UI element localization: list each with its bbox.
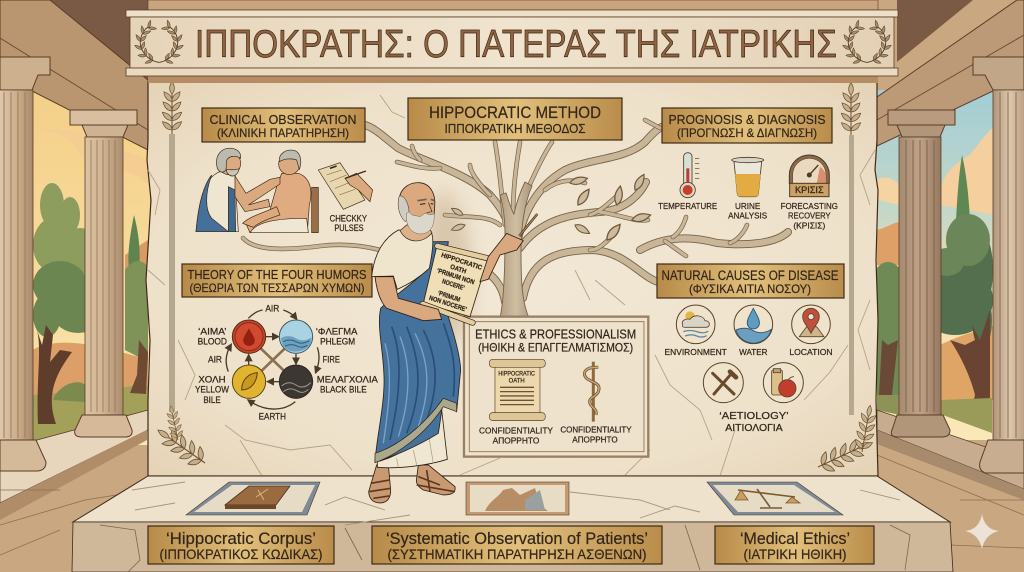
right pilaster strip [849, 135, 854, 415]
plaque: prognosis and diagnosis [662, 108, 832, 143]
himation border [375, 398, 457, 463]
right inner column [888, 110, 955, 437]
checkky pulses label: CHECKKY [330, 213, 367, 223]
plaque: prognosis and diagnosis: (ΠΡΟΓΝΩΣΗ & ΔΙΑΓΝΩΣΗ) [677, 126, 817, 140]
left front column [0, 57, 50, 471]
bottom plaque: medical ethics [715, 526, 874, 564]
mosaic: scales [707, 482, 843, 515]
natural causes labels: ENVIRONMENT [664, 347, 728, 357]
prognosis labels [658, 201, 838, 230]
plaque: clinical observation: (ΚΛΙΝΙΚΗ ΠΑΡΑΤΗΡΗΣΗ) [217, 126, 349, 140]
natural causes labels: ‘AETIOLOGY’ [719, 411, 789, 422]
right olive tree [913, 214, 993, 422]
plaque: theory of four humors: (ΘΕΩΡΙΑ ΤΩΝ ΤΕΣΣΑΡΩΝ ΧΥΜΩΝ) [190, 281, 364, 295]
floor tile lines [0, 455, 1024, 555]
humor labels: FIRE [323, 354, 340, 364]
plaque: hippocratic method [408, 98, 622, 140]
bottom plaque: medical ethics: (ΙΑΤΡΙΚΗ ΗΘΙΚΗ) [744, 546, 846, 562]
blue himation [375, 242, 461, 462]
title laurels [134, 20, 892, 64]
yellow bile humor [232, 365, 266, 398]
humor labels: ΜΕΛΑΓΧΟΛΙΑ [317, 374, 378, 384]
scroll [423, 244, 489, 323]
right landscape [875, 90, 995, 440]
humor labels: EARTH [259, 412, 286, 422]
tree of method [243, 120, 788, 350]
panel: clinical observation scene [196, 148, 373, 233]
humor labels: AIR [208, 354, 222, 364]
prognosis labels: RECOVERY [788, 211, 831, 221]
upper tunic [372, 230, 433, 289]
head [398, 183, 435, 234]
caduceus icon [584, 362, 599, 422]
scales icon [735, 489, 800, 508]
humor labels: AIR [265, 304, 280, 314]
ethics labels [479, 425, 632, 445]
ethics labels: CONFIDENTIALITY [479, 425, 553, 435]
right front column [973, 57, 1024, 473]
chair [312, 187, 318, 233]
icon: sparkle watermark [965, 514, 999, 549]
humor labels: BILE [203, 395, 221, 405]
oath scroll icon: OATH [509, 379, 525, 385]
plaque: clinical observation [202, 108, 365, 142]
natural causes labels [664, 347, 833, 434]
plaque: prognosis and diagnosis: PROGNOSIS & DIAGNOSIS [668, 112, 826, 127]
bottom plaque: hippocratic corpus: ‘Hippocratic Corpus’ [166, 529, 316, 548]
book icon [225, 486, 290, 509]
left landscape [30, 85, 150, 445]
prognosis labels: TEMPERATURE [658, 201, 717, 211]
humor labels [195, 304, 378, 422]
prognosis labels: ANALYSIS [728, 211, 767, 221]
scroll text: HIPPOCRATIC [440, 252, 483, 272]
left pilaster strip [169, 134, 175, 412]
scroll text: ‘PRIMUM NON [436, 267, 475, 286]
left inner column [70, 110, 137, 437]
physician [196, 148, 280, 232]
scroll text: OATH [449, 264, 467, 276]
oath scroll icon [489, 359, 545, 421]
environment icon [682, 311, 709, 337]
left roof beam [0, 0, 148, 150]
leaves [450, 173, 651, 242]
panel: prognosis icons [658, 153, 838, 230]
natural causes labels: LOCATION [789, 347, 833, 357]
scroll text [428, 252, 483, 314]
lower tunic [377, 410, 447, 468]
mosaic: figures [466, 482, 569, 515]
location icon [799, 308, 824, 337]
plaque: hippocratic method: ΙΠΠΟΚΡΑΤΙΚΗ ΜΕΘΟΔΟΣ [444, 121, 586, 136]
marble wall [146, 82, 880, 478]
panel: ethics and professionalism [464, 317, 648, 457]
bottom plaque: hippocratic corpus [148, 526, 334, 564]
plaque: theory of four humors: THEORY OF THE FOUR HUMORS [188, 267, 367, 282]
diet cutlery icon [713, 372, 736, 394]
figure: Hippocrates with scroll [369, 183, 537, 503]
right stylobate [877, 410, 1024, 500]
humor labels: YELLOW [195, 385, 229, 395]
blood humor [232, 320, 266, 353]
natural causes labels: ΑΙΤΙΟΛΟΓΙΑ [725, 423, 783, 434]
bottom plaque: systematic observation: (ΣΥΣΤΗΜΑΤΙΚΗ ΠΑΡΑΤΗΡΗΣΗ ΑΣΘΕΝΩΝ) [388, 546, 646, 562]
scroll text: NON NOCERE’ [428, 295, 468, 314]
holding arm [375, 277, 442, 321]
prognosis labels: FORECASTING [781, 201, 838, 211]
panel: four humors diagram [195, 304, 378, 422]
panel: ethics and professionalism: (ΗΘΙΚΗ & ΕΠΑΓΓΕΛΜΑΤΙΣΜΟΣ) [478, 341, 633, 354]
oath scroll icon: HIPPOCRATIC [498, 372, 536, 378]
laurel sprigs on wall [151, 82, 880, 478]
plaque: hippocratic method: HIPPOCRATIC METHOD [429, 103, 601, 122]
checkky pulses label [330, 213, 367, 233]
humor labels: BLOOD [198, 337, 227, 347]
ethics labels: ΑΠΟΡΡΗΤΟ [493, 435, 540, 445]
plaque: theory of four humors [182, 264, 372, 297]
panel: natural causes icons [664, 305, 833, 434]
humor labels: PHLEGM [320, 337, 355, 347]
trunk [500, 182, 532, 318]
ethics labels: CONFIDENTIALITY [560, 425, 632, 435]
bottom plaque: systematic observation: ‘Systematic Observation of Patients’ [386, 529, 648, 548]
water icon [736, 308, 771, 343]
left olive tree [33, 183, 110, 424]
wall cracks [148, 95, 875, 476]
thermometer icon [680, 153, 699, 198]
pointing arm and stick [480, 214, 537, 282]
entablature with title [126, 10, 898, 83]
humor labels: BLACK BILE [320, 385, 367, 395]
bottom plaque: systematic observation [372, 526, 662, 564]
panel: ethics and professionalism: ETHICS & PROFESSIONALISM [475, 326, 636, 341]
plaque: natural causes of disease: NATURAL CAUSES OF DISEASE [662, 268, 838, 283]
natural causes labels: WATER [739, 347, 767, 357]
humor labels: ‘ΦΛΕΓΜΑ [316, 326, 357, 336]
gauge icon: ΚΡΙΣΙΣ [795, 185, 824, 195]
beaker icon [732, 157, 764, 197]
top stone behind title [148, 0, 878, 10]
humor connectors [261, 348, 285, 372]
gauge icon [789, 155, 829, 197]
plaque: natural causes of disease [657, 264, 844, 298]
left stylobate [0, 410, 148, 520]
scroll text: ‘PRIMUM [437, 290, 461, 304]
black bile humor [279, 365, 313, 398]
humor labels: ΧΟΛΗ [198, 374, 226, 384]
diet food icon [772, 369, 796, 397]
prognosis labels: (ΚΡΙΣΙΣ) [793, 220, 825, 230]
scroll text: NOCERE’ [441, 278, 465, 292]
phlegm humor [279, 320, 313, 353]
patient [243, 150, 311, 233]
right roof beam [877, 0, 1024, 146]
legs and sandals [369, 465, 455, 503]
mosaic: book [186, 482, 320, 515]
title: ΙΠΠΟΚΡΑΤΗΣ: Ο ΠΑΤΕΡΑΣ ΤΗΣ ΙΑΤΡΙΚΗΣ [195, 23, 837, 66]
plaque: natural causes of disease: (ΦΥΣΙΚΑ ΑΙΤΙΑ ΝΟΣΟΥ) [689, 282, 811, 296]
bottom plaque: medical ethics: ‘Medical Ethics’ [740, 529, 850, 548]
clipboard and hand [318, 163, 373, 209]
plaque: clinical observation: CLINICAL OBSERVATION [210, 112, 356, 127]
bottom plaque: hippocratic corpus: (ΙΠΠΟΚΡΑΤΙΚΟΣ ΚΩΔΙΚΑΣ) [160, 546, 322, 562]
ethics labels: ΑΠΟΡΡΗΤΟ [572, 435, 618, 445]
pedestal [72, 476, 953, 572]
prognosis labels: URINE [735, 201, 761, 211]
humor labels: ‘ΑΙΜΑ’ [198, 326, 226, 336]
checkky pulses label: PULSES [334, 223, 364, 233]
